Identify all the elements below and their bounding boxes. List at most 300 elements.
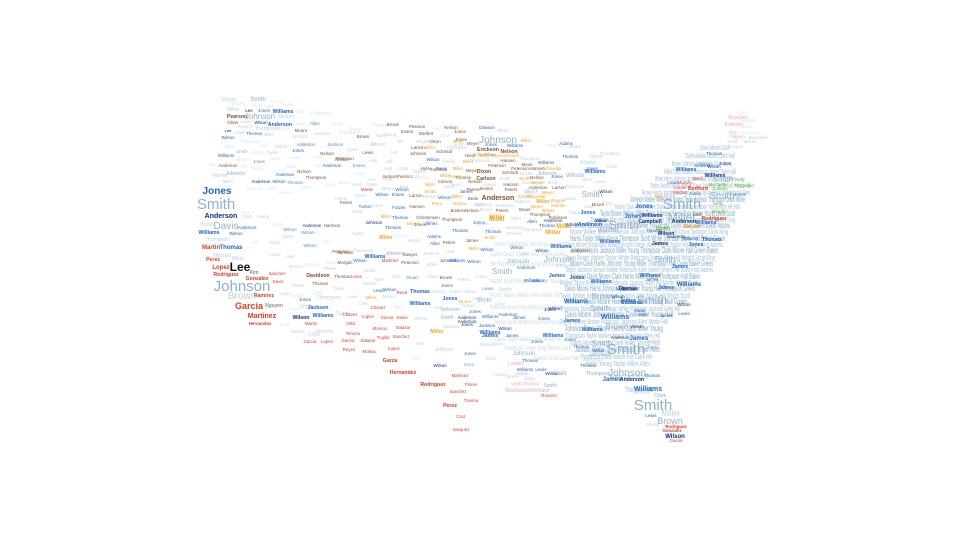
region: Upper Midwest: Weber: [542, 208, 555, 213]
region: Upper Midwest: Johnson: [479, 135, 517, 146]
region: Florida: Lewis: [645, 413, 657, 418]
region: California and big West Coast names: Miller: [232, 256, 244, 262]
region: Rocky Mountains and northern plains: Miller: [489, 217, 506, 223]
region: Southwest and Texas: Smith: [498, 287, 512, 293]
region: California and big West Coast names: Peterson: [332, 249, 350, 254]
region: Appalachia and the South: Landry: [508, 361, 524, 367]
region: Southwest and Texas: Brown: [440, 275, 453, 280]
region: Upper Midwest: Miller: [582, 177, 593, 182]
region: Pacific Northwest: Harris: [271, 99, 284, 104]
region: Great Lakes and Northeast: Miller: [700, 162, 712, 168]
region: Upper Midwest: Schmidt: [503, 153, 520, 158]
region: Pacific Northwest: Anderson: [252, 179, 271, 184]
region: California and big West Coast names: Wilson: [291, 329, 305, 334]
region: Southwest and Texas: Jones: [475, 274, 488, 279]
region: California and big West Coast names: Thompson: [205, 237, 229, 243]
region: Great Lakes and Northeast: Jones: [624, 214, 642, 220]
region: Rocky Mountains and northern plains: Pearson: [397, 174, 414, 179]
region: Southwest and Texas: Anderson: [458, 319, 477, 324]
region: Rocky Mountains and northern plains: Hall: [369, 158, 377, 163]
region: California and big West Coast names: Wilson: [301, 230, 315, 235]
region: Great Lakes and Northeast: Wilson: [658, 231, 674, 237]
region: Upper Midwest: Jones: [586, 166, 599, 171]
region: Rocky Mountains and northern plains: Scott: [352, 182, 363, 187]
region: Rocky Mountains and northern plains: Wilson: [426, 157, 440, 162]
region: dense eastern name field: Taylor Jackson Brown Walker Robinson Allen Martin Wright Hill Scott King Adams: [565, 265, 713, 274]
region: California and big West Coast names: Garcia: [235, 301, 264, 311]
region: California and big West Coast names: Lee: [230, 260, 251, 274]
region: Upper Midwest: Jones: [477, 221, 490, 226]
region: Pacific Northwest: White: [251, 103, 263, 108]
region: Pacific Northwest: Martin: [251, 166, 264, 171]
region: California and big West Coast names: Smith: [272, 222, 284, 227]
region: Southwest and Texas: Wilson: [363, 281, 377, 286]
region: Upper Midwest: Miller: [536, 199, 550, 205]
region: Pacific Northwest: Carson: [279, 190, 294, 195]
region: California and big West Coast names: Nelson: [289, 264, 303, 269]
region: Appalachia and the South: Wilson: [630, 324, 644, 329]
region: Rocky Mountains and northern plains: Dunn: [444, 184, 455, 189]
region: California and big West Coast names: Rodriguez: [213, 272, 239, 278]
region: Rocky Mountains and northern plains: Thomas: [392, 215, 409, 220]
region: Southwest and Texas: Cole: [358, 301, 368, 306]
region: California and big West Coast names: Thomas: [312, 281, 329, 286]
region: Great Lakes and Northeast: Murphy: [712, 209, 727, 214]
region: Rocky Mountains and northern plains: Hofer: [421, 166, 432, 171]
region: Appalachia and the South: Boudreaux: [505, 388, 531, 394]
region: Southwest and Texas: Chavez: [371, 305, 385, 310]
region: Rocky Mountains and northern plains: Nelson: [468, 179, 482, 184]
region: Upper Midwest: Dawson: [479, 125, 495, 130]
region: Maine and upper New England: Gagnon: [729, 134, 745, 139]
region: Pacific Northwest: Martin: [275, 144, 288, 149]
region: California and big West Coast names: White: [269, 240, 281, 245]
region: California and big West Coast names: Lopez: [212, 265, 230, 271]
region: Pacific Northwest: Anderson: [219, 163, 238, 168]
region: California and big West Coast names: Martinez: [248, 313, 277, 320]
region: Southwest and Texas: Davis: [493, 341, 504, 346]
region: Rocky Mountains and northern plains: Olson: [429, 139, 441, 144]
region: Rocky Mountains and northern plains: Frazier: [392, 205, 406, 210]
region: Appalachia and the South: Davis: [646, 345, 659, 351]
region: Appalachia and the South: James: [564, 318, 580, 324]
region: Great Lakes and Northeast: Miller: [668, 210, 696, 224]
region: Appalachia and the South: Thompson: [555, 263, 576, 268]
region: California and big West Coast names: Smith: [197, 196, 235, 213]
region: Rocky Mountains and northern plains: Baker: [474, 202, 486, 207]
region: Maine and upper New England: Ouellette: [739, 118, 757, 123]
region: Pacific Northwest: Pearson: [227, 114, 247, 120]
region: California and big West Coast names: Davis: [273, 279, 284, 284]
region: Pacific Northwest: Wright: [331, 121, 344, 126]
region: Upper Midwest: Smith: [499, 176, 511, 181]
region: Rocky Mountains and northern plains: Miller: [463, 159, 474, 164]
word map of the United States: Johnson Walker Miller Hall Brown Taylor Jackson Thompson Davis White: [630, 194, 745, 204]
region: Great Lakes and Northeast: Wilson: [595, 218, 609, 223]
region: Rocky Mountains and northern plains: Miller: [452, 194, 463, 199]
region: Southwest and Texas: Allen: [430, 241, 440, 246]
region: Southwest and Texas: Garcia: [342, 338, 355, 343]
region: Appalachia and the South: Williams: [590, 279, 612, 285]
region: Southwest and Texas: Trevino: [464, 398, 479, 403]
region: Florida: Rodriguez: [665, 424, 688, 429]
region: dense eastern name field: Taylor Walker Brown Robinson Jackson Allen Martin Hill: [560, 317, 668, 326]
region: Rocky Mountains and northern plains: Jones: [371, 203, 384, 208]
region: Southwest and Texas: Garza: [383, 358, 397, 364]
region: Rocky Mountains and northern plains: Meyer: [467, 141, 480, 146]
region: California and big West Coast names: Hall: [321, 239, 329, 244]
region: California and big West Coast names: Lopez: [321, 339, 333, 344]
region: dense eastern name field: Taylor Walker Brown Robinson Jackson Allen Martin Hill Wright Scott: [560, 291, 691, 300]
region: Upper Midwest: Anderson: [544, 218, 563, 223]
region: Appalachia and the South: Jones: [544, 307, 557, 312]
region: Pacific Northwest: Anderson: [276, 172, 295, 177]
region: Appalachia and the South: Thomas: [573, 344, 590, 349]
region: Rocky Mountains and northern plains: Nelson: [383, 174, 397, 179]
region: California and big West Coast names: Wilson: [229, 231, 243, 236]
region: Upper Midwest: Taylor: [589, 154, 603, 160]
region: Florida: Garcia: [670, 438, 683, 443]
region: Great Lakes and Northeast: Miller: [655, 194, 666, 199]
region: Pacific Northwest: [209, 97, 362, 195]
region: dense eastern name field: Walker Davis Moore: [610, 372, 648, 381]
region: Southwest and Texas: Tenorio: [346, 331, 361, 336]
region: Southwest and Texas: Taylor: [352, 231, 364, 236]
region: Florida: Jackson: [633, 390, 650, 395]
region: dense eastern name field: Thompson Taylor Walker Brown White Robinson Jackson Allen Hill: [560, 304, 680, 313]
region: Great Lakes and Northeast: Bedford: [688, 186, 708, 192]
region: Upper Midwest: Anderson: [482, 195, 514, 202]
region: Southwest and Texas: Flores: [465, 382, 478, 387]
region: Upper Midwest: Thompson: [530, 212, 551, 217]
region: Upper Midwest: Adams: [559, 141, 574, 146]
region: Great Lakes and Northeast: Smith: [656, 226, 670, 232]
region: Appalachia and the South: [498, 244, 702, 398]
region: California and big West Coast names: Williams: [312, 313, 334, 319]
region: Upper Midwest: Peterson: [488, 163, 506, 168]
region: Maine and upper New England: Cote: [737, 110, 747, 115]
region: Southwest and Texas: Adams: [427, 234, 442, 239]
region: Southwest and Texas: Smith: [492, 267, 512, 276]
region: Upper Midwest: Adams: [580, 160, 596, 166]
region: Upper Midwest: Johnson: [476, 202, 493, 207]
word map of the United States: Taylor Moore Miller Walker Davis Johnson Smith Hall Wright Hill: [650, 181, 750, 190]
region: Rocky Mountains and northern plains: Wright: [407, 173, 420, 178]
region: California and big West Coast names: Johnson: [214, 278, 270, 295]
region: Appalachia and the South: James: [620, 298, 636, 304]
region: Maine and upper New England: Pelletier: [725, 122, 744, 128]
region: Southwest and Texas: Martinez: [452, 373, 468, 378]
region: Pacific Northwest: Thompson: [306, 175, 327, 180]
region: Rocky Mountains and northern plains: Heidt: [465, 153, 476, 158]
region: Appalachia and the South: James: [630, 336, 649, 342]
region: Rocky Mountains and northern plains: Evans: [353, 163, 366, 168]
region: Southwest and Texas: Jackson: [479, 323, 496, 328]
region: Southwest and Texas: Jones: [350, 274, 363, 279]
region: Southwest and Texas: Peterson: [401, 260, 419, 265]
region: Florida: Miller: [661, 409, 681, 418]
region: dense eastern name field: Johnson Davis Moore Harris Clark Miller Young Hall Green: [565, 296, 687, 306]
region: Southwest and Texas: Baird: [464, 362, 475, 367]
region: Upper Midwest: Thomas: [562, 154, 579, 159]
region: Southwest and Texas: Moreno: [373, 326, 388, 331]
region: Appalachia and the South: Wilson: [498, 326, 512, 331]
region: Rocky Mountains and northern plains: Hall: [384, 166, 392, 171]
region: Upper Midwest: Schultz: [551, 203, 565, 208]
region: Great Lakes and Northeast: Williams: [682, 236, 699, 241]
region: Pacific Northwest: Smith: [250, 97, 266, 103]
region: Southwest and Texas: Harris: [449, 289, 462, 294]
region: Appalachia and the South: James: [658, 285, 674, 291]
region: California and big West Coast names: Martin: [202, 245, 220, 251]
region: Appalachia and the South: Anderson: [620, 377, 644, 383]
region: Pacific Northwest: Thomas: [287, 180, 304, 185]
region: Southwest and Texas: Allen: [374, 277, 384, 282]
region: Upper Midwest: Thompson: [470, 158, 491, 163]
region: Great Lakes and Northeast: Williams: [704, 173, 726, 179]
region: Maine and upper New England: Smith: [727, 139, 739, 144]
region: Rocky Mountains and northern plains: Clark: [440, 133, 451, 138]
region: Southwest and Texas: Salazar: [361, 338, 376, 343]
region: Great Lakes and Northeast: Jones: [689, 191, 702, 196]
region: Southwest and Texas: Lewis: [373, 288, 385, 293]
region: Rocky Mountains and northern plains: Pearson: [409, 124, 426, 129]
region: Upper Midwest: Williams: [507, 143, 524, 148]
region: Upper Midwest: Hoover: [522, 180, 537, 185]
region: Upper Midwest: Hanson: [503, 182, 519, 187]
region: Appalachia and the South: Williams: [564, 299, 589, 305]
region: Pacific Northwest: Davis: [286, 164, 297, 169]
region: Appalachia and the South: Lee: [521, 251, 529, 256]
region: Great Lakes and Northeast: Jones: [688, 242, 704, 248]
region: Southwest and Texas: Sanchez: [392, 334, 410, 339]
region: Southwest and Texas: Peters: [443, 240, 456, 245]
region: Pacific Northwest: Wilson: [254, 120, 268, 125]
region: California and big West Coast names: Jones: [203, 186, 232, 197]
region: Maine and upper New England: Clark: [717, 146, 728, 151]
region: Upper Midwest: Olson: [484, 152, 496, 157]
region: Rocky Mountains and northern plains: Moore: [339, 180, 352, 185]
region: dense eastern name field: Davis Moore Harris Johnson Clark Miller Young Hall Thompson Green: [565, 283, 695, 293]
region: Rocky Mountains and northern plains: Lopez: [423, 219, 435, 224]
region: Upper Midwest: Jones: [580, 210, 596, 216]
region: Appalachia and the South: Wilson: [545, 371, 559, 376]
region: dense eastern name field: Davis Moore Harris Clark Miller Young Hall: [570, 338, 660, 347]
region: Rocky Mountains and northern plains: Miller: [453, 166, 464, 171]
region: Upper Midwest: Carlson: [476, 176, 496, 182]
region: Pacific Northwest: Robinson: [311, 111, 333, 117]
region: Southwest and Texas: Johnson: [434, 347, 454, 353]
region: Rocky Mountains and northern plains: Evans: [392, 192, 405, 197]
region: Rocky Mountains and northern plains: Moore: [371, 142, 385, 148]
region: Great Lakes and Northeast: Bass: [693, 176, 704, 181]
region: Great Lakes and Northeast: Thomas: [702, 237, 722, 243]
region: Rocky Mountains and northern plains: Pryor: [432, 201, 443, 206]
region: Rocky Mountains and northern plains: Peters: [340, 200, 353, 205]
region: Appalachia and the South: James: [549, 273, 565, 279]
region: California and big West Coast names: Thomas: [219, 245, 243, 251]
region: Appalachia and the South: Williams: [677, 282, 702, 288]
region: Rocky Mountains and northern plains: Hoag: [382, 176, 393, 181]
region: California and big West Coast names: [197, 186, 351, 344]
region: Appalachia and the South: Wilson: [532, 278, 546, 283]
region: Southwest and Texas: Martin: [408, 238, 421, 243]
region: Upper Midwest: Berg: [479, 153, 489, 158]
region: Maine and upper New England: Wilson: [743, 139, 757, 144]
region: Southwest and Texas: Williams: [480, 330, 501, 336]
region: Upper Midwest: Williams: [584, 169, 606, 175]
region: Rocky Mountains and northern plains: Larson: [409, 193, 423, 198]
region: Rocky Mountains and northern plains: Wilson: [375, 192, 389, 197]
region: Appalachia and the South: Johnson: [507, 259, 529, 265]
region: Appalachia and the South: Moore: [507, 374, 520, 379]
region: Appalachia and the South: Edwards: [621, 300, 643, 306]
region: California and big West Coast names: Moore: [241, 210, 254, 215]
region: Southwest and Texas: Baca: [394, 304, 405, 309]
region: Southwest and Texas: Hall: [434, 305, 442, 310]
region: dense eastern name field: Moore Clark Thomas Hall Young Lewis Harris: [495, 242, 567, 248]
region: Southwest and Texas: Miller: [469, 246, 480, 251]
region: Rocky Mountains and northern plains: Larson: [451, 142, 465, 147]
region: Pacific Northwest: Williams: [272, 109, 294, 115]
region: California and big West Coast names: Anderson: [303, 223, 322, 228]
region: Pacific Northwest: Anderson: [323, 163, 342, 168]
region: dense eastern name field: Johnson Davis Moore Harris Clark Miller Young: [565, 323, 663, 333]
region: Southwest and Texas: Morgan: [338, 260, 353, 265]
region: California and big West Coast names: Peters: [324, 266, 337, 271]
region: Appalachia and the South: Jones: [531, 339, 544, 344]
region: Great Lakes and Northeast: Johnson: [694, 163, 711, 168]
region: Southwest and Texas: Johnson: [423, 251, 440, 256]
region: Great Lakes and Northeast: Sinclair: [673, 190, 688, 195]
region: Appalachia and the South: Thompson: [586, 371, 610, 377]
region: Rocky Mountains and northern plains: Davis: [450, 182, 461, 187]
region: California and big West Coast names: Thompson: [317, 295, 341, 301]
region: Upper Midwest: Erickson: [477, 147, 499, 153]
region: Southwest and Texas: James: [482, 333, 498, 339]
region: Appalachia and the South: Williams: [517, 367, 534, 372]
region: Rocky Mountains and northern plains: Thomas: [385, 225, 402, 230]
region: California and big West Coast names: Davis: [283, 234, 294, 239]
region: Upper Midwest: Smith: [547, 180, 559, 185]
region: Rocky Mountains and northern plains: Jones: [414, 222, 427, 227]
region: Southwest and Texas: Diaz: [412, 356, 420, 361]
region: Rocky Mountains and northern plains: Brown: [357, 134, 370, 139]
region: Rocky Mountains and northern plains: Bowers: [451, 208, 466, 213]
region: Great Lakes and Northeast: Williams: [676, 167, 697, 173]
region: Rocky Mountains and northern plains: Moore: [382, 186, 395, 191]
region: Pacific Northwest: Johnson: [225, 171, 245, 177]
region: Pacific Northwest: Jackson: [246, 186, 263, 191]
region: Southwest and Texas: Wilson: [467, 259, 481, 264]
region: Great Lakes and Northeast: Smith: [709, 191, 735, 202]
region: dense eastern name field: Johnson Harris Jackson Miller Young Thompson Clark Moore Hall Green Baker: [570, 245, 718, 255]
region: California and big West Coast names: Bryan: [200, 222, 214, 228]
region: Pacific Northwest: Davis: [349, 127, 362, 133]
region: Great Lakes and Northeast: Jones: [719, 161, 732, 166]
region: California and big West Coast names: Nelson: [213, 253, 231, 259]
region: Appalachia and the South: Smith: [655, 255, 675, 264]
region: Rocky Mountains and northern plains: Nelson: [465, 208, 479, 213]
region: California and big West Coast names: Garcia: [304, 339, 317, 344]
region: Upper Midwest: Moon: [522, 162, 533, 167]
region: Upper Midwest: Martin: [565, 224, 578, 229]
region: Appalachia and the South: James: [646, 277, 659, 282]
region: dense eastern name field: Jackson Walker Taylor Robinson Brown Allen: [575, 344, 660, 354]
region: Pacific Northwest: Morris: [213, 173, 228, 179]
region: Upper Midwest: Thomas: [539, 223, 556, 228]
region: Southwest and Texas: Sanchez: [449, 389, 467, 394]
region: Upper Midwest: Jones: [485, 142, 498, 147]
region: California and big West Coast names: Thomas: [334, 274, 351, 279]
region: Southwest and Texas: Jones: [441, 283, 454, 288]
region: Appalachia and the South: Thomas: [644, 373, 661, 378]
region: Upper Midwest: Jones: [594, 218, 607, 223]
region: Appalachia and the South: Jones: [564, 337, 577, 342]
region: California and big West Coast names: Gonzalez: [246, 276, 269, 282]
region: Upper Midwest: Robinson: [566, 184, 585, 189]
region: Upper Midwest: Jensen: [479, 186, 494, 191]
region: Upper Midwest: Taylor: [602, 201, 614, 206]
region: Appalachia and the South: Williams: [542, 333, 564, 339]
region: Pacific Northwest: Johnson: [292, 134, 309, 139]
region: Southwest and Texas: Martinez: [382, 258, 398, 263]
region: Appalachia and the South: Wilson: [677, 302, 691, 307]
region: Southwest and Texas: Jones: [461, 322, 474, 327]
region: Southwest and Texas: Cruz: [456, 414, 466, 419]
region: Pacific Northwest: Hall: [314, 154, 322, 159]
region: Great Lakes and Northeast: [578, 151, 754, 248]
region: Rocky Mountains and northern plains: [335, 122, 506, 230]
region: Rocky Mountains and northern plains: Hall: [368, 142, 376, 147]
region: Southwest and Texas: Hernandez: [390, 370, 417, 376]
region: Upper Midwest: Evans: [484, 182, 497, 187]
region: dense eastern name field: Martin Scott Wright Davis Hall Young: [495, 320, 561, 326]
region: California and big West Coast names: Williams: [198, 230, 220, 236]
region: Appalachia and the South: Lewis: [616, 286, 628, 291]
region: Pacific Northwest: Taylor: [282, 102, 294, 107]
region: Rocky Mountains and northern plains: Wilson: [438, 195, 452, 200]
region: Rocky Mountains and northern plains: Nelson: [453, 201, 467, 206]
region: Upper Midwest: Lewis: [594, 179, 606, 184]
region: Upper Midwest: Schneider: [526, 194, 546, 199]
region: Pacific Northwest: Miller: [227, 107, 239, 113]
region: Pacific Northwest: Davis: [339, 130, 352, 136]
region: Rocky Mountains and northern plains: Jones: [473, 220, 486, 225]
region: Southwest and Texas: Jackson: [443, 324, 460, 329]
region: Upper Midwest: Moore: [569, 144, 582, 149]
region: Pacific Northwest: Lee: [245, 108, 253, 113]
region: Rocky Mountains and northern plains: Clark: [398, 166, 409, 171]
region: Rocky Mountains and northern plains: Peters: [467, 187, 480, 192]
region: dense eastern name field: Taylor Davis Walker Allen White Baker: [490, 252, 566, 258]
region: Southwest and Texas: Ortiz: [391, 274, 401, 279]
region: California and big West Coast names: Anderson: [238, 225, 257, 230]
region: Great Lakes and Northeast: Moore: [694, 154, 707, 159]
region: Southwest and Texas: Lewis: [482, 286, 494, 291]
region: Rocky Mountains and northern plains: Lee: [368, 177, 376, 182]
region: Appalachia and the South: Wilson: [548, 306, 562, 311]
region: Rocky Mountains and northern plains: Johnson: [366, 220, 383, 225]
region: California and big West Coast names: Lewis: [289, 306, 301, 311]
region: Pacific Northwest: Clark: [264, 104, 275, 109]
region: California and big West Coast names: Hall: [286, 254, 294, 259]
region: Appalachia and the South: Williams: [582, 327, 603, 333]
region: Maine and upper New England: Morin: [741, 124, 752, 129]
region: Southwest and Texas: Williams: [364, 254, 386, 260]
region: Appalachia and the South: Wilson: [510, 245, 524, 250]
region: Appalachia and the South: Wilson: [535, 248, 549, 253]
